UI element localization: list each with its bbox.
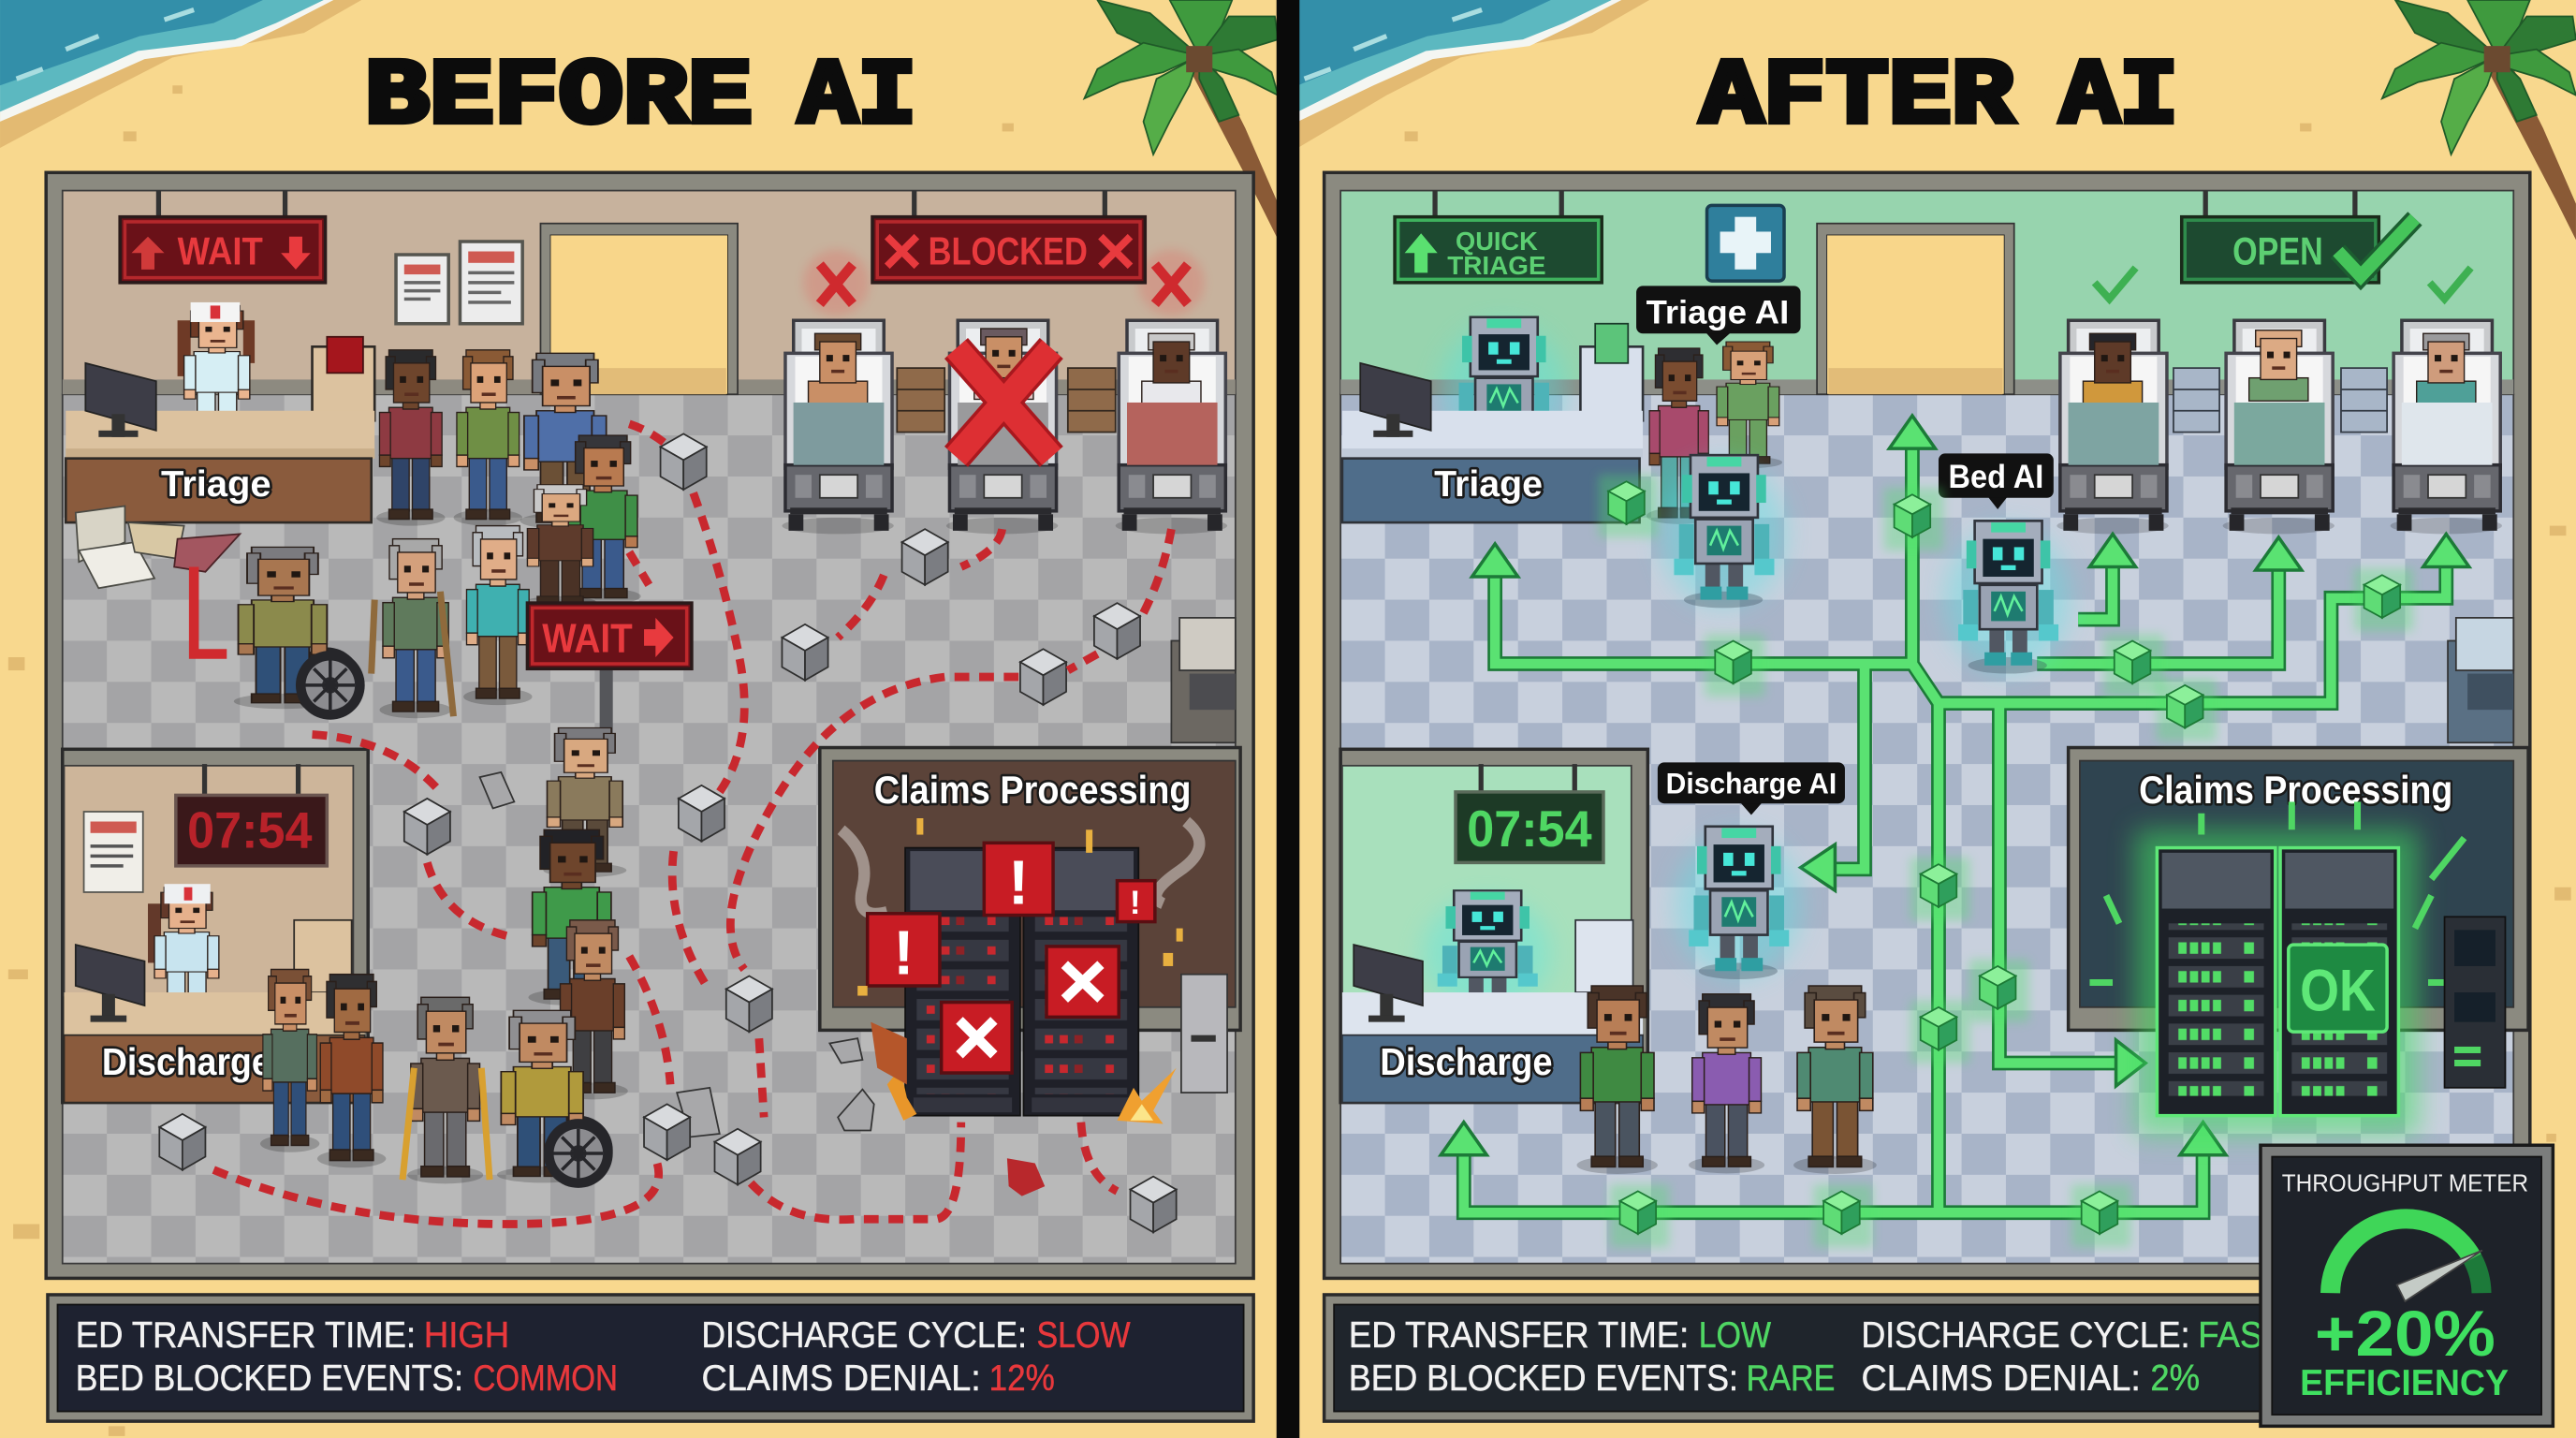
title: before: AI <box>798 45 916 150</box>
sign: quick triage: QUICK <box>1456 227 1538 256</box>
meter title: THROUGHPUT METER <box>2282 1168 2528 1196</box>
bedside tables <box>897 368 1116 433</box>
hospital frame <box>46 172 1253 1278</box>
bed 1 <box>782 320 894 534</box>
alert: exclamation top: ! <box>1008 848 1029 917</box>
floor <box>1340 394 2513 1264</box>
sign: wait <box>120 191 326 283</box>
sign: open: OPEN <box>2232 229 2323 273</box>
stat: bed blocked events: BED BLOCKED EVENTS: <box>1349 1358 1738 1399</box>
robot: discharge desk <box>1425 890 1549 1013</box>
doorway <box>540 224 738 394</box>
floor <box>63 394 1236 1264</box>
robot: discharge ai <box>1676 827 1801 979</box>
bubble: bed ai <box>1939 453 2054 509</box>
queue of waiting patients: lower <box>402 727 628 1188</box>
bubble: bed ai: Bed AI <box>1949 459 2043 495</box>
right palm tree <box>2382 0 2576 240</box>
discharge timer: 07:54 <box>187 802 313 859</box>
bed 1 <box>2056 320 2169 534</box>
patient: purple shirt walking <box>1689 994 1764 1173</box>
sign: quick triage: TRIAGE <box>1447 251 1546 280</box>
smoke <box>842 822 1199 914</box>
stat: bed blocked events: RARE <box>1747 1358 1835 1399</box>
back wall <box>1340 191 2513 394</box>
bed 3 <box>2391 320 2502 534</box>
doorway <box>1817 224 2014 394</box>
bubble: triage ai <box>1636 286 1801 345</box>
stat: claims denial: CLAIMS DENIAL: <box>1862 1358 2141 1399</box>
bubble: discharge ai: Discharge AI <box>1666 767 1837 800</box>
gauge arc remainder <box>2472 1258 2481 1293</box>
patient: wheelchair <box>234 547 365 720</box>
discharged patients <box>1576 986 1877 1174</box>
sign: blocked <box>872 191 1145 283</box>
discharge patients <box>260 969 386 1167</box>
robot: triage floor <box>1661 455 1786 608</box>
beds: after <box>2056 320 2502 534</box>
stat: discharge cycle: FAST <box>2198 1315 2284 1356</box>
copier <box>2448 618 2513 742</box>
meter value: +20% <box>2315 1298 2496 1370</box>
discharge timer <box>176 764 327 866</box>
patient: green polo <box>565 435 641 604</box>
label: triage: Triage <box>161 464 271 505</box>
alert: x upper <box>1046 946 1119 1017</box>
stat: claims denial: 12% <box>989 1358 1055 1399</box>
label: claims processing: Claims Processing <box>874 768 1191 812</box>
patient: blue shirt <box>520 353 610 529</box>
title: before: BEFORE <box>365 45 753 150</box>
room: discharge before <box>63 749 368 1103</box>
left beach corner: ocean and shoreline <box>0 0 361 148</box>
server racks: healthy <box>2089 801 2505 1136</box>
triage patients <box>1647 342 1782 524</box>
bed 2 <box>2223 320 2334 534</box>
big red x <box>956 348 1051 457</box>
rubble <box>480 772 874 1137</box>
patient: wheelchair yellow <box>497 1010 613 1188</box>
triage monitor <box>85 363 156 437</box>
room: claims before <box>820 748 1240 1030</box>
triage robot desk <box>1441 317 1566 462</box>
fire <box>871 1022 1177 1123</box>
icon: big check <box>2337 218 2415 276</box>
bubble: triage ai: Triage AI <box>1647 295 1789 331</box>
small red broken item <box>1007 1158 1045 1196</box>
sign: quick triage <box>1395 191 1602 283</box>
patient: pink shirt <box>1647 348 1711 524</box>
alert: exclamation top <box>984 843 1053 917</box>
discharge monitor <box>76 945 145 1022</box>
triage monitor <box>1360 363 1431 437</box>
bedside tables <box>2174 368 2387 433</box>
sign: wait: WAIT <box>178 229 263 273</box>
copier <box>1171 618 1236 742</box>
ok status badge <box>2289 945 2387 1032</box>
alert: exclamation left: ! <box>893 919 914 989</box>
sparks <box>857 818 1183 996</box>
patient: crutches <box>402 997 490 1183</box>
ok status badge: OK <box>2300 958 2376 1023</box>
queue of waiting patients <box>234 350 641 720</box>
energy bursts <box>2089 801 2465 983</box>
patient: teal shirt walking <box>1793 986 1877 1174</box>
triage desk <box>66 337 374 522</box>
label: triage: Triage <box>1434 464 1543 505</box>
scattered paperwork <box>76 506 240 588</box>
title: after <box>1701 45 2178 150</box>
stat: ed transfer time: HIGH <box>424 1315 509 1356</box>
right beach corner: ocean and shoreline <box>1298 0 1649 148</box>
discharge monitor <box>1354 945 1423 1022</box>
label: claims processing: Claims Processing <box>2139 768 2452 812</box>
gauge arc <box>2331 1219 2472 1293</box>
arrowheads <box>1441 416 2469 1155</box>
patient: teal shirt <box>463 526 533 705</box>
skirting <box>63 379 1236 394</box>
stat: ed transfer time: ED TRANSFER TIME: <box>76 1315 416 1356</box>
sign: blocked: BLOCKED <box>929 229 1088 273</box>
room: claims after <box>2069 748 2528 1030</box>
icon: medical cross <box>1707 205 1784 281</box>
robot: bed ai <box>1945 521 2070 674</box>
discharge nurse <box>148 884 222 1024</box>
supply cubes: after <box>1599 475 2413 1247</box>
server racks: failing <box>857 818 1183 1123</box>
red x marks <box>803 250 1204 315</box>
bed 3 <box>1116 320 1227 534</box>
patient: old man with crutches <box>372 539 453 718</box>
side server <box>2445 917 2505 1088</box>
room: discharge after <box>1340 749 1647 1103</box>
left palm tree <box>1084 0 1278 240</box>
stats bar: before <box>48 1295 1253 1421</box>
stat: bed blocked events: BED BLOCKED EVENTS: <box>76 1358 463 1399</box>
discharge timer: 07:54 <box>1467 800 1592 858</box>
stats bar: after <box>1325 1295 2530 1421</box>
discharge desk <box>1342 992 1643 1103</box>
alert: exclamation small <box>1117 881 1155 922</box>
discharge timer <box>1456 764 1603 862</box>
back wall <box>63 191 1236 394</box>
big red x highlight <box>956 348 1051 457</box>
alert: exclamation left <box>868 914 940 989</box>
label: discharge: Discharge <box>1380 1040 1553 1083</box>
throughput meter <box>2261 1145 2553 1426</box>
stat: ed transfer time: ED TRANSFER TIME: <box>1349 1315 1689 1356</box>
sign: open <box>2182 191 2378 283</box>
centre divider <box>1277 0 1299 1438</box>
bubble: discharge ai <box>1658 762 1845 814</box>
title: before <box>365 45 916 150</box>
stat: discharge cycle: DISCHARGE CYCLE: <box>701 1315 1027 1356</box>
stat: claims denial: CLAIMS DENIAL: <box>701 1358 981 1399</box>
patient: red shirt <box>376 350 445 526</box>
title: after: AFTER <box>1701 45 2014 150</box>
skirting <box>1340 379 2513 394</box>
alert: x lower <box>942 1003 1012 1073</box>
gauge needle <box>2397 1251 2482 1301</box>
stat: ed transfer time: LOW <box>1699 1315 1771 1356</box>
dashed red paths <box>213 424 1171 1224</box>
patient: green shirt dark skin <box>528 829 615 1005</box>
patient: green back <box>260 969 319 1152</box>
red path: triage <box>194 566 227 654</box>
meter caption: EFFICIENCY <box>2300 1363 2509 1403</box>
sign: wait with arrow <box>527 603 692 751</box>
label: discharge: Discharge <box>102 1040 271 1083</box>
supply cubes: before <box>159 433 1177 1232</box>
stat: bed blocked events: COMMON <box>474 1358 618 1399</box>
stat: discharge cycle: DISCHARGE CYCLE: <box>1862 1315 2190 1356</box>
green flow paths <box>1441 416 2469 1212</box>
patient: tan shirt <box>543 727 626 877</box>
stat: discharge cycle: SLOW <box>1036 1315 1131 1356</box>
bed 2 <box>946 320 1058 534</box>
sign: wait with arrow: WAIT <box>542 616 633 662</box>
triage nurse <box>178 302 255 447</box>
patient: green shirt <box>1714 342 1782 468</box>
title: after: AI <box>2060 45 2178 150</box>
beds: before <box>782 250 1227 534</box>
patient: brown shirt <box>557 920 628 1099</box>
stat: claims denial: 2% <box>2150 1358 2200 1399</box>
panel: after AI hospital <box>1325 172 2553 1426</box>
alert: exclamation small: ! <box>1130 885 1141 921</box>
discharge desk <box>65 992 365 1103</box>
triage desk <box>1342 324 1643 522</box>
patient: brown coat <box>524 485 596 608</box>
patient: orange back <box>317 975 386 1167</box>
flow path highlight <box>1464 444 2446 1212</box>
icon: small checks <box>2095 268 2471 299</box>
wall notices <box>396 242 522 324</box>
patient: green shirt <box>454 350 522 526</box>
patient: green shirt walking <box>1576 986 1658 1174</box>
hospital frame <box>1325 172 2530 1278</box>
discharge notice <box>84 812 143 892</box>
broken pc tower <box>1181 975 1227 1093</box>
